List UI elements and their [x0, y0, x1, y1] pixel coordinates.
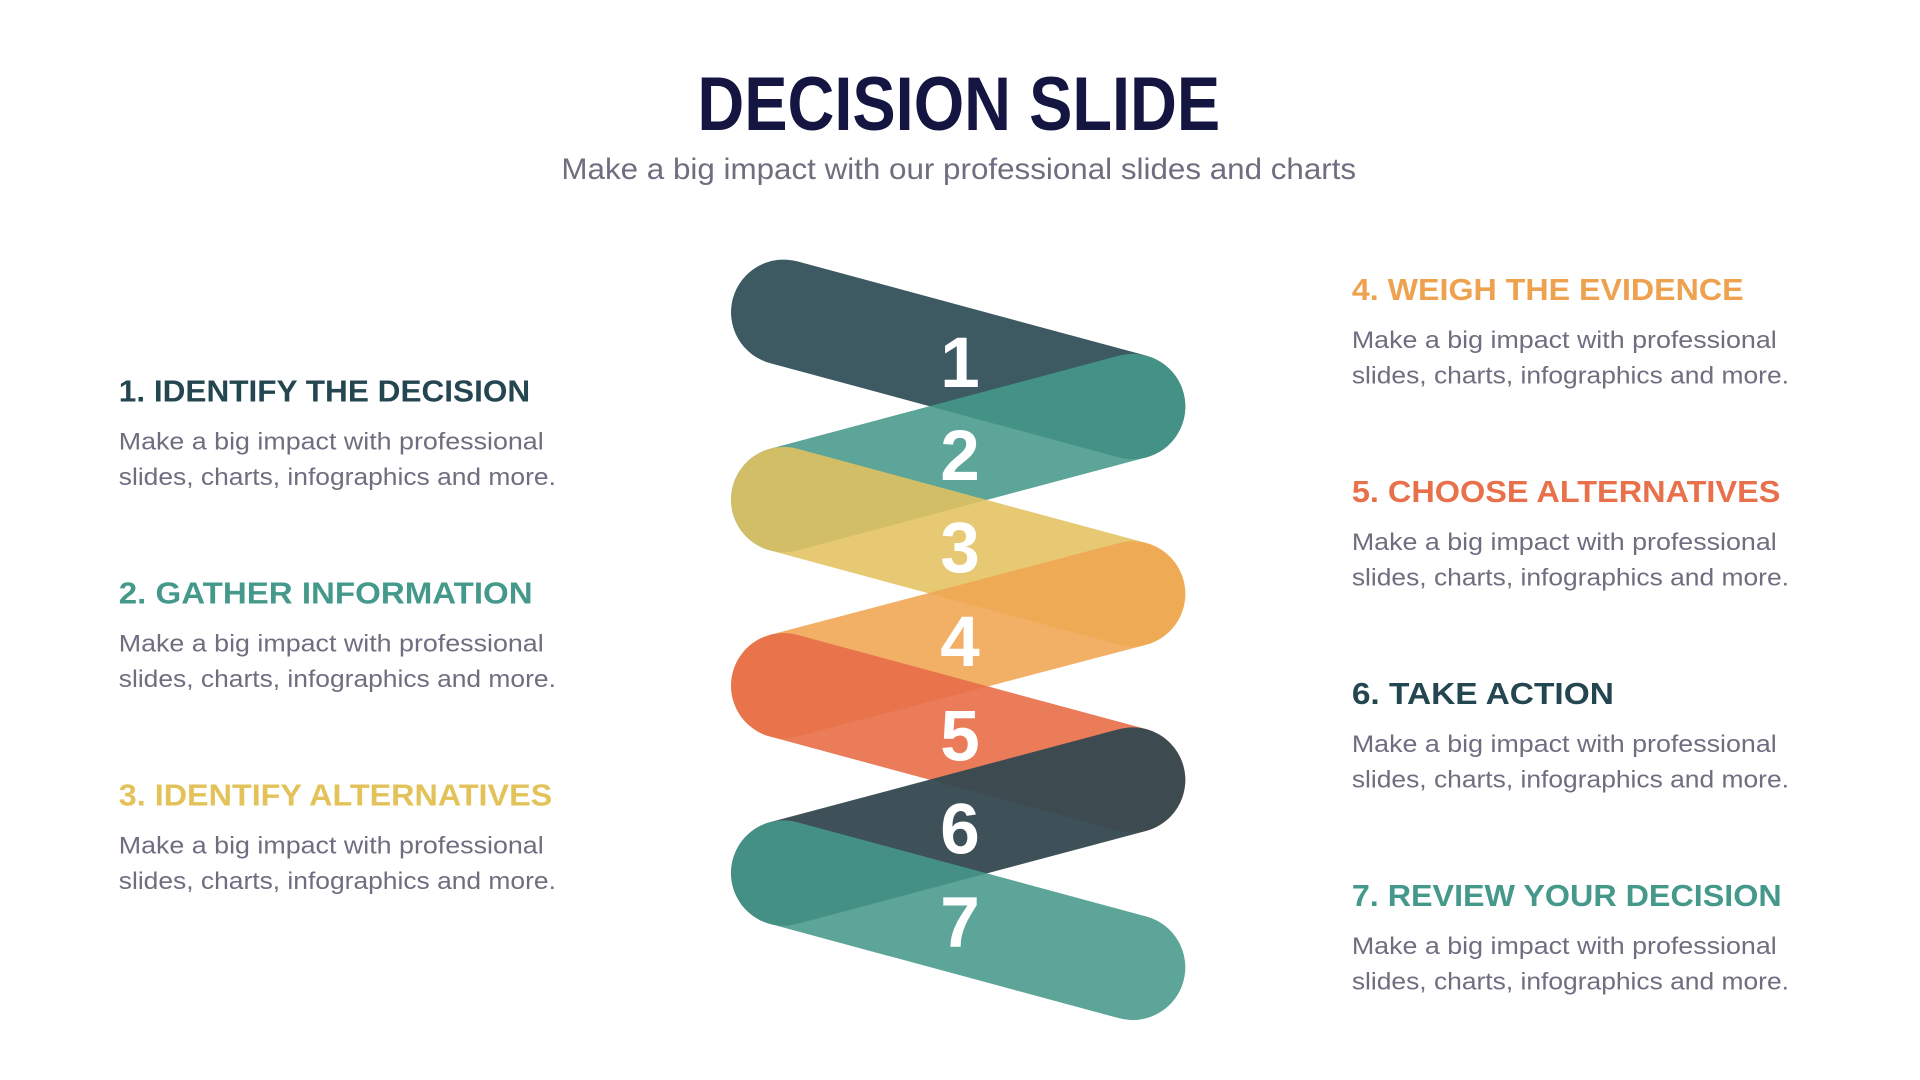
- step 6 text: 6. TAKE ACTION: [1352, 677, 1614, 711]
- step 3 text: 3. IDENTIFY ALTERNATIVES: [119, 779, 552, 813]
- step 6 text: slides, charts, infographics and more.: [1352, 766, 1789, 793]
- step 5 text: slides, charts, infographics and more.: [1352, 564, 1789, 591]
- step 2 text: [119, 577, 556, 693]
- step numbers: 1: [940, 324, 980, 403]
- step 3 text: Make a big impact with professional: [119, 832, 544, 859]
- step 6 text: Make a big impact with professional: [1352, 731, 1777, 758]
- step 6 text: [1352, 677, 1789, 793]
- step 1 text: 1. IDENTIFY THE DECISION: [119, 375, 530, 409]
- zigzag ribbon chart: [784, 312, 1133, 967]
- step 1 text: [119, 375, 556, 491]
- step 5 text: 5. CHOOSE ALTERNATIVES: [1352, 475, 1780, 509]
- step 7 text: 7. REVIEW YOUR DECISION: [1352, 879, 1782, 913]
- step numbers: 6: [940, 790, 980, 869]
- step numbers: [940, 324, 980, 963]
- step 2 text: 2. GATHER INFORMATION: [119, 577, 533, 611]
- step 7 text: slides, charts, infographics and more.: [1352, 968, 1789, 995]
- step 3 text: [119, 779, 556, 895]
- step numbers: 3: [940, 509, 980, 588]
- step 4 text: [1352, 273, 1789, 389]
- step 2 text: Make a big impact with professional: [119, 630, 544, 657]
- step 1 text: slides, charts, infographics and more.: [119, 464, 556, 491]
- step numbers: 4: [940, 603, 980, 682]
- step numbers: 5: [940, 697, 980, 776]
- subtitle: Make a big impact with our professional slides and charts: [561, 153, 1356, 186]
- step numbers: 2: [940, 417, 980, 496]
- step 3 text: slides, charts, infographics and more.: [119, 868, 556, 895]
- title: DECISION SLIDE: [697, 62, 1220, 147]
- step numbers: 7: [940, 884, 980, 963]
- step 1 text: Make a big impact with professional: [119, 428, 544, 455]
- step 4 text: slides, charts, infographics and more.: [1352, 362, 1789, 389]
- step 5 text: Make a big impact with professional: [1352, 529, 1777, 556]
- step 4 text: 4. WEIGH THE EVIDENCE: [1352, 273, 1744, 307]
- step 7 text: [1352, 879, 1789, 995]
- step 2 text: slides, charts, infographics and more.: [119, 666, 556, 693]
- step 5 text: [1352, 475, 1789, 591]
- step 4 text: Make a big impact with professional: [1352, 327, 1777, 354]
- step 7 text: Make a big impact with professional: [1352, 933, 1777, 960]
